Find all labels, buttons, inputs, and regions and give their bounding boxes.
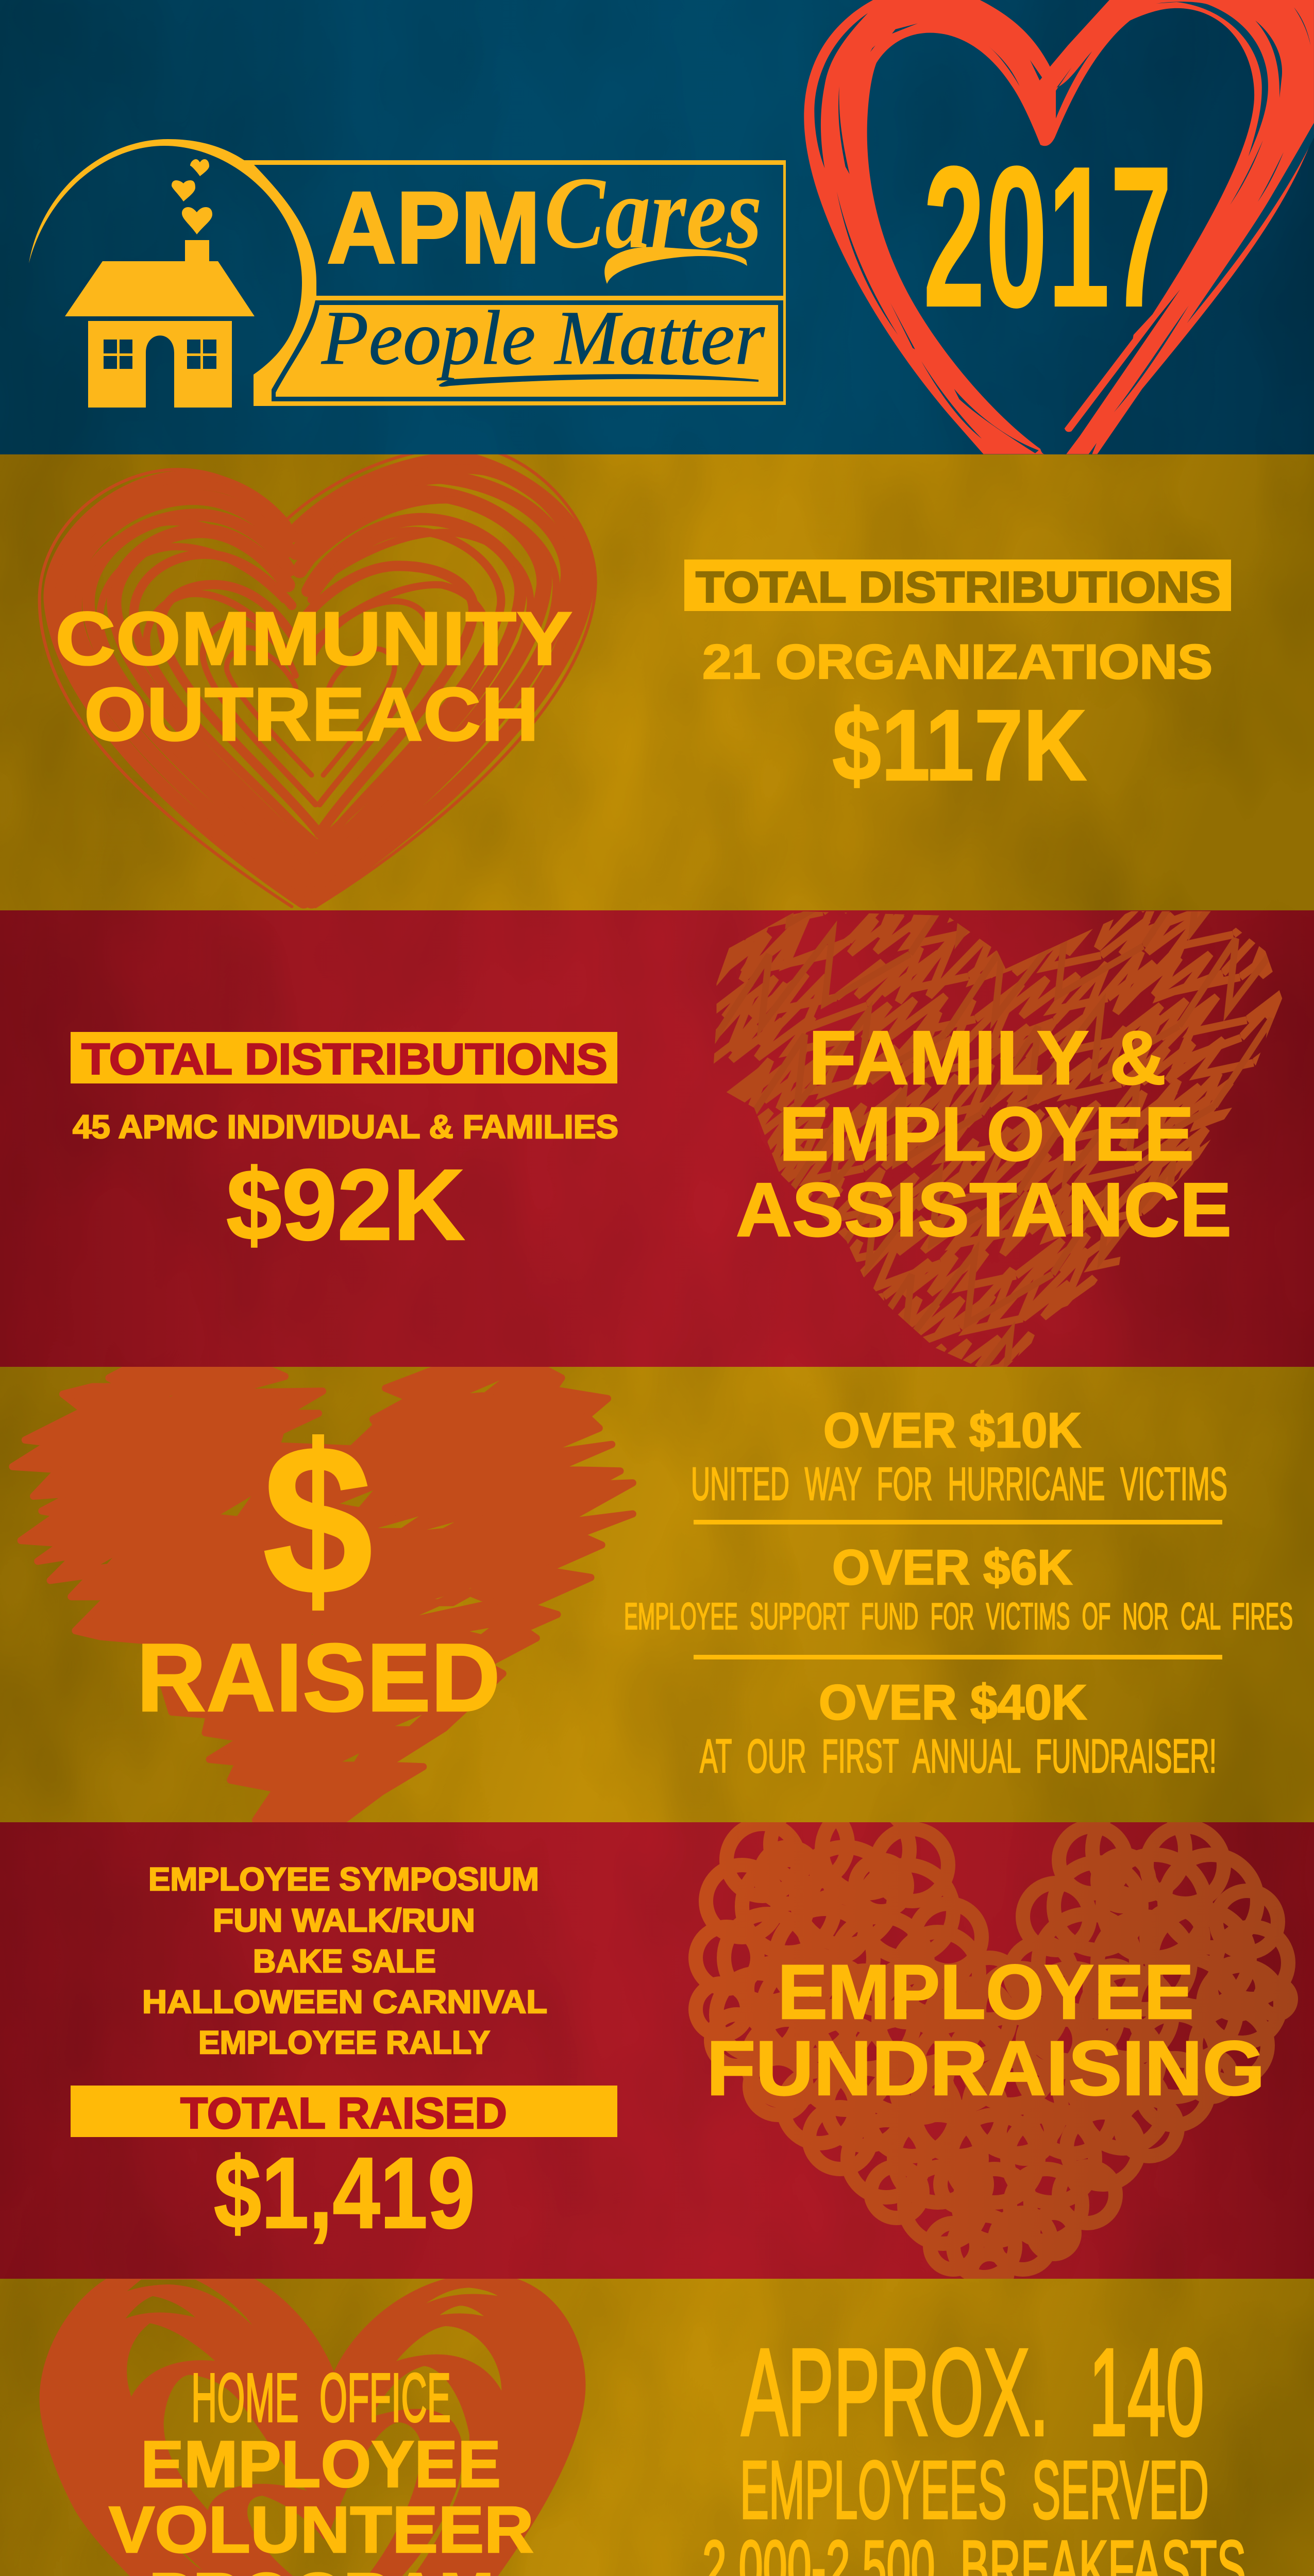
People Matter script: People Matter (321, 295, 765, 381)
heading: home office employee volunteer program: HOME OFFICE (191, 2360, 451, 2436)
stat: $117K: $117K (832, 689, 1087, 802)
heading: family and employee assistance (736, 1015, 1232, 1252)
item: over $10K: OVER $10K (823, 1403, 1081, 1458)
heading: family and employee assistance: EMPLOYEE (779, 1092, 1194, 1177)
panel: employee fundraising (0, 1803, 1314, 2290)
heading: community outreach (55, 597, 572, 757)
panel: header (0, 0, 1314, 454)
label box: total distributions: TOTAL DISTRIBUTIONS (696, 563, 1221, 612)
icon: large red heart (804, 0, 1314, 454)
icon: brush heart (40, 2279, 585, 2576)
item: over $6K (624, 1540, 1293, 1637)
stat: 21 organizations: 21 ORGANIZATIONS (702, 635, 1212, 689)
list: fundraising events: EMPLOYEE SYMPOSIUM (148, 1861, 539, 1897)
panel: community outreach (0, 447, 1314, 910)
label box: total raised (71, 2086, 617, 2138)
heading: employee fundraising (706, 1948, 1265, 2111)
list: fundraising events (142, 1861, 547, 2061)
logo: APM Cares People Matter (29, 139, 786, 408)
item: over $10K (691, 1403, 1227, 1510)
Cares swoosh (604, 247, 747, 284)
People Matter underline (439, 374, 759, 387)
logo arch and frame (29, 139, 786, 406)
heading: community outreach: COMMUNITY (55, 597, 572, 681)
list: fundraising events: BAKE SALE (253, 1943, 436, 1979)
icon: house (65, 240, 255, 408)
stat: $1,419: $1,419 (214, 2137, 475, 2249)
APM wordmark: APM (327, 171, 541, 284)
icon: zigzag scribble heart (690, 910, 1299, 1367)
stat: individuals and families: 45 APMC INDIVIDUAL & FAMILIES (73, 1108, 618, 1145)
heading: home office employee volunteer program (109, 2360, 534, 2576)
icon: scribble heart (40, 447, 596, 907)
item: over $40K (700, 1675, 1217, 1783)
panel: employee volunteer program (0, 2279, 1314, 2576)
heading: home office employee volunteer program: VOLUNTEER (109, 2493, 534, 2567)
item: over $6K: OVER $6K (832, 1540, 1072, 1595)
heading: raised: RAISED (137, 1623, 500, 1732)
list: fundraising events: FUN WALK/RUN (213, 1903, 475, 1939)
item: over $40K: OVER $40K (819, 1675, 1087, 1730)
stats: breakfast volunteering (702, 2323, 1246, 2576)
panel: dollars raised (0, 1366, 1314, 1822)
heading: family and employee assistance: ASSISTANCE (736, 1167, 1232, 1252)
icon: looping scribble heart (696, 1803, 1291, 2290)
stat: $92K: $92K (226, 1148, 465, 1261)
heading: family and employee assistance: FAMILY & (808, 1015, 1166, 1100)
label box: total raised: TOTAL RAISED (180, 2089, 507, 2138)
icon: three small hearts (172, 159, 212, 234)
list: fundraising events: EMPLOYEE RALLY (198, 2025, 490, 2061)
icon: solid scribble heart (12, 1366, 633, 1820)
icon: dollar sign: $ (262, 1400, 373, 1640)
list: fundraising events: HALLOWEEN CARNIVAL (142, 1984, 547, 2020)
panel: family and employee assistance (0, 910, 1314, 1367)
label box: total distributions: TOTAL DISTRIBUTIONS (81, 1035, 608, 1084)
heading: community outreach: OUTREACH (84, 672, 539, 757)
Cares wordmark: Cares (544, 156, 762, 270)
heading: employee fundraising: FUNDRAISING (706, 2025, 1265, 2111)
heading: employee fundraising: EMPLOYEE (778, 1948, 1194, 2035)
heading: home office employee volunteer program: EMPLOYEE (141, 2428, 501, 2501)
